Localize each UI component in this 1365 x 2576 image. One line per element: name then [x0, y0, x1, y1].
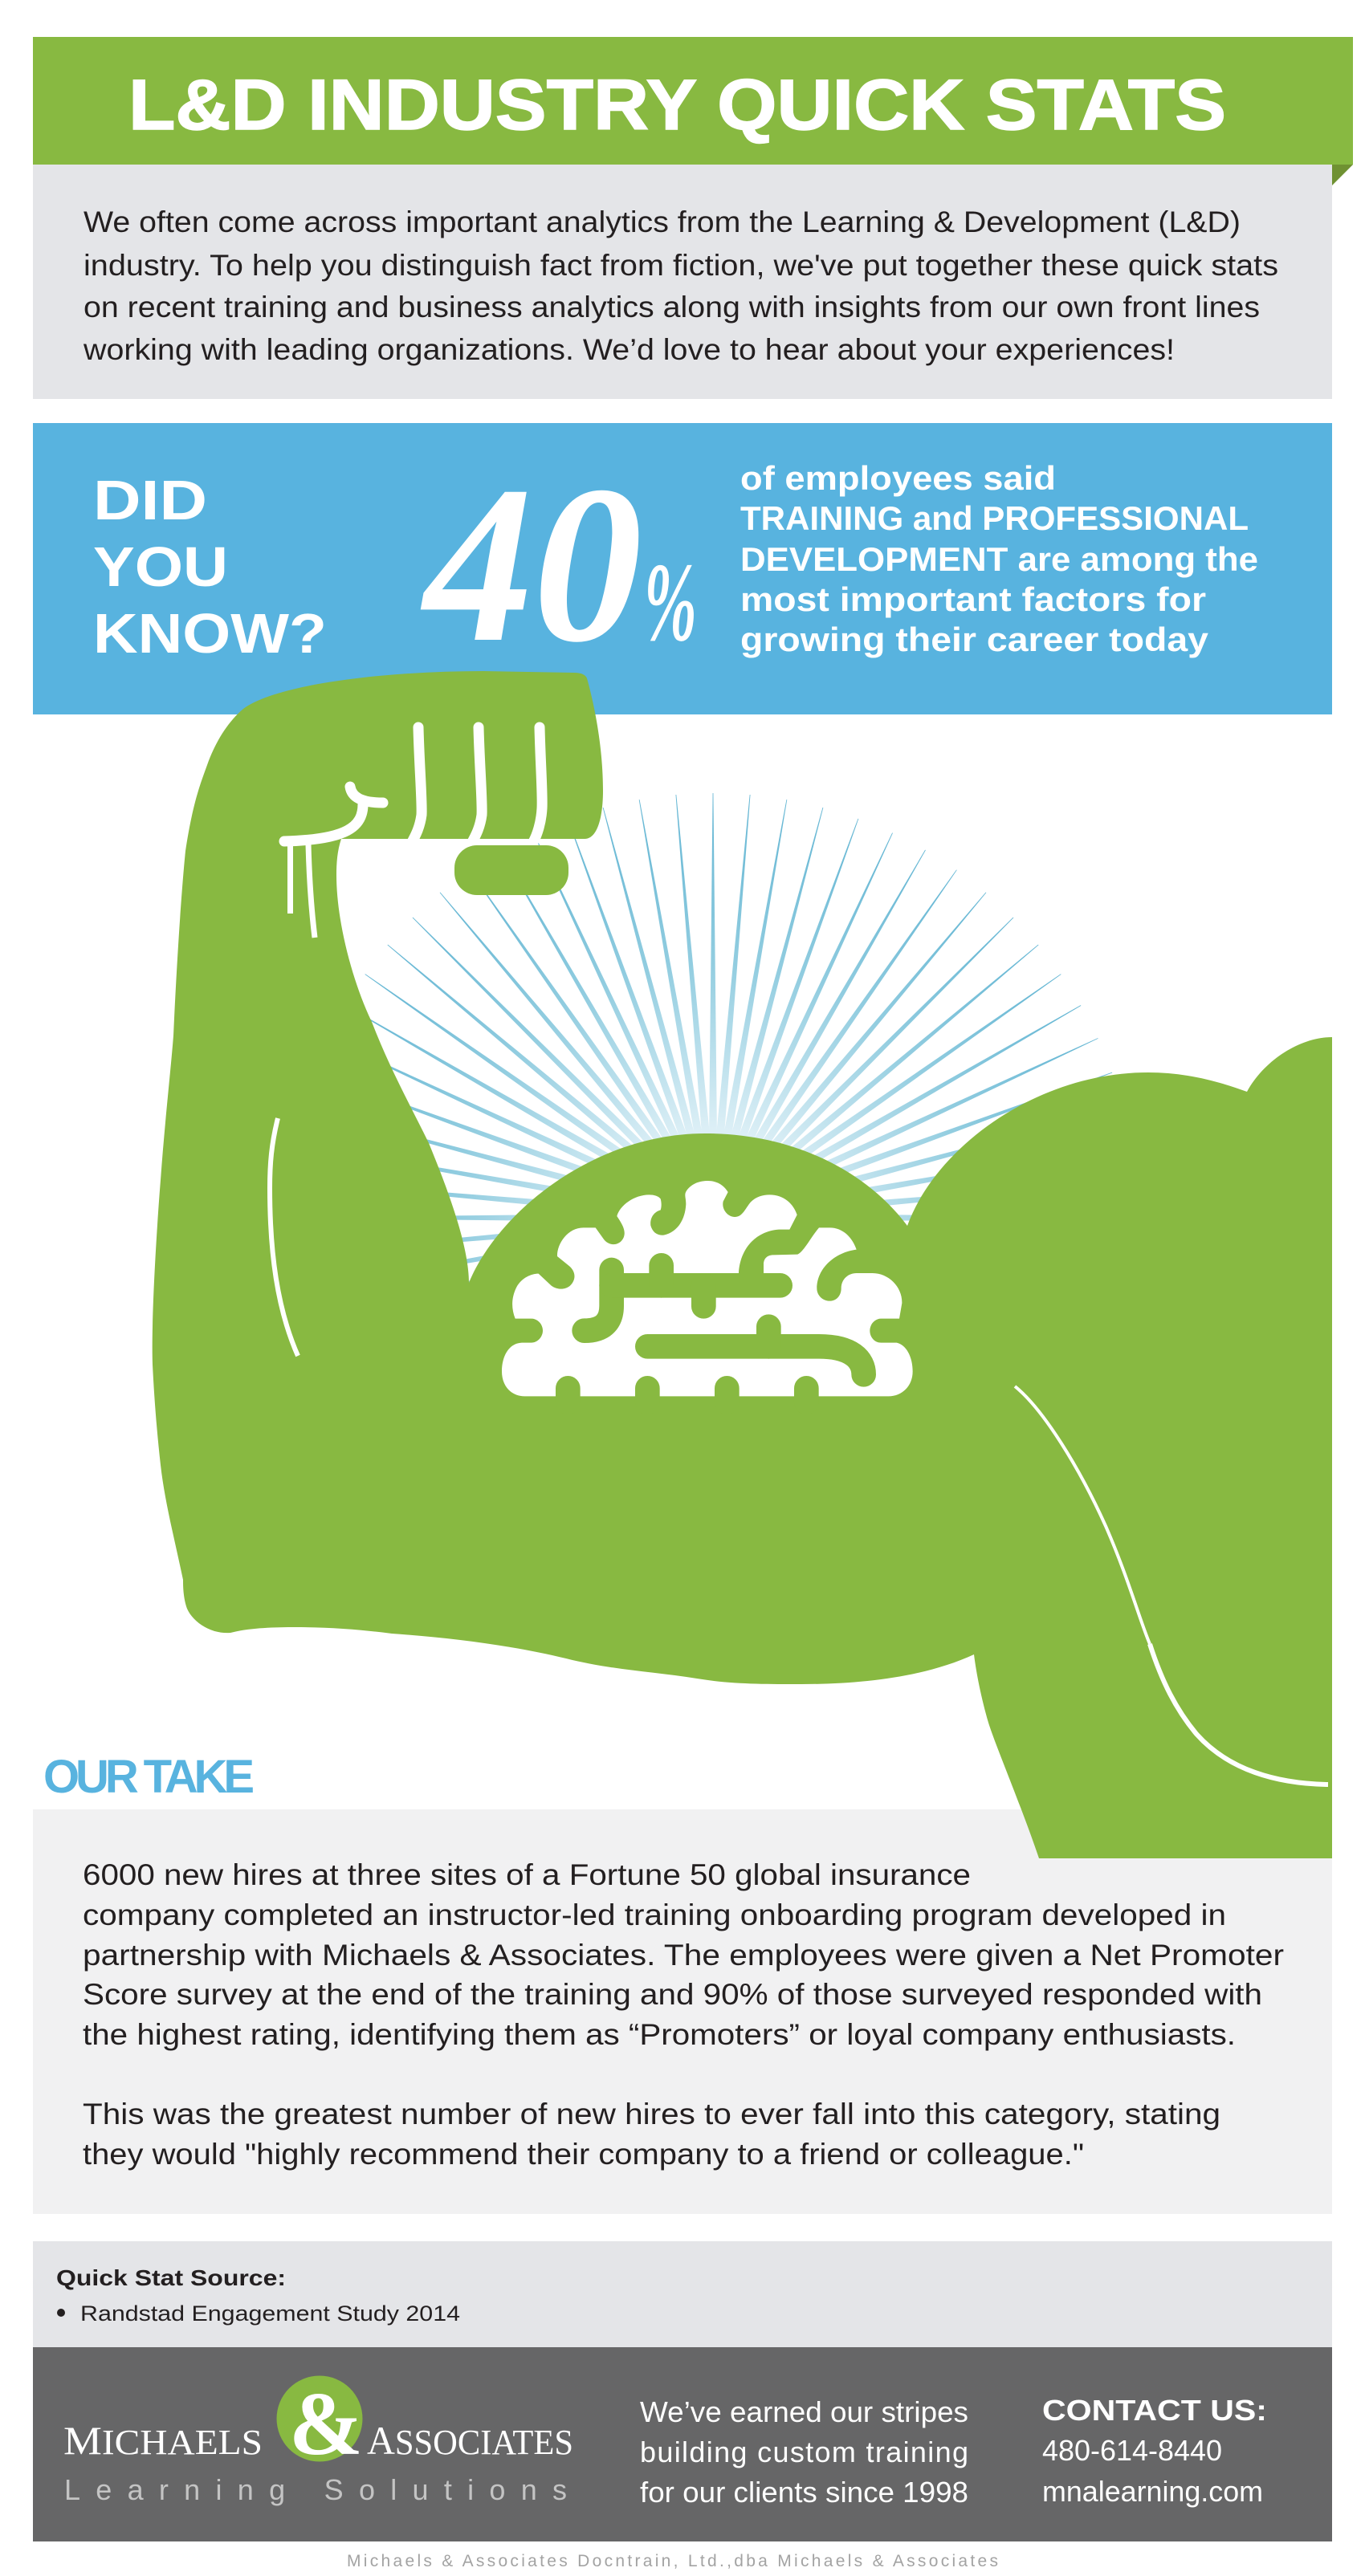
tagline: for our clients since 1998 — [640, 2476, 968, 2509]
intro text block — [83, 206, 1278, 366]
logo: Learning Solutions — [64, 2473, 567, 2506]
our take text: the highest rating, identifying them as “Promoters” or loyal company enthusiasts. — [83, 2018, 1236, 2051]
tagline: building custom training — [640, 2436, 968, 2468]
arm muscle line left — [270, 1118, 298, 1356]
panel: did you know — [33, 423, 1332, 714]
fist: finger lines — [284, 727, 542, 842]
did you know heading: DID — [93, 469, 207, 531]
contact — [1042, 2394, 1267, 2508]
intro text block: on recent training and business analytics along with insights from our own front lines — [84, 291, 1260, 324]
source heading: Quick Stat Source: — [56, 2265, 286, 2290]
tagline: We’ve earned our stripes — [640, 2395, 968, 2428]
our take text: This was the greatest number of new hires to ever fall into this category, stating — [83, 2098, 1220, 2130]
panel: our take — [33, 1809, 1332, 2214]
intro text block: industry. To help you distinguish fact from fiction, we've put together these quick stats — [84, 249, 1278, 282]
tagline — [640, 2395, 968, 2509]
big stat 40 percent: % — [644, 540, 697, 665]
stat description: TRAINING and PROFESSIONAL — [740, 499, 1249, 537]
sunburst rays — [288, 793, 1138, 1332]
stat description: growing their career today — [740, 621, 1209, 658]
logo: & — [289, 2375, 363, 2474]
our take text: 6000 new hires at three sites of a Fortune 50 global insurance — [83, 1858, 971, 1891]
our take text: Score survey at the end of the training and 90% of those surveyed responded with — [83, 1978, 1262, 2011]
footer legal line: Michaels & Associates Docntrain, Ltd.,dba Michaels & Associates — [347, 2552, 998, 2570]
intro text block: working with leading organizations. We’d love to hear about your experiences! — [83, 333, 1175, 366]
panel: quick stat source — [33, 2241, 1332, 2347]
title: L&D INDUSTRY QUICK STATS — [128, 64, 1226, 144]
icon: brain — [502, 1181, 913, 1402]
icon: thumb pill — [454, 845, 568, 895]
stat description: DEVELOPMENT are among the — [740, 540, 1258, 578]
panel: intro — [33, 165, 1332, 399]
our take text — [83, 1858, 1284, 2171]
our take text: partnership with Michaels & Associates. The employees were given a Net Promoter — [83, 1939, 1284, 1972]
stat description: most important factors for — [740, 580, 1206, 618]
panel: footer — [33, 2347, 1332, 2541]
title banner — [33, 37, 1353, 185]
contact: mnalearning.com — [1042, 2475, 1263, 2508]
arm muscle line right — [1015, 1386, 1328, 1784]
stat description: of employees said — [740, 459, 1056, 497]
did you know heading — [93, 469, 327, 665]
intro text block: We often come across important analytics from the Learning & Development (L&D) — [84, 206, 1241, 238]
fist: wrist tendons — [291, 844, 315, 938]
big stat 40 percent: 40 — [421, 439, 642, 689]
contact: 480-614-8440 — [1042, 2434, 1222, 2467]
logo: MICHAELS — [63, 2418, 263, 2463]
our take text: they would "highly recommend their company to a friend or colleague." — [83, 2138, 1084, 2171]
source bullet item: Randstad Engagement Study 2014 — [80, 2301, 460, 2326]
stat description — [740, 459, 1258, 658]
did you know heading: KNOW? — [93, 602, 327, 665]
our take text: company completed an instructor-led training onboarding program developed in — [83, 1898, 1226, 1931]
logo: ASSOCIATES — [367, 2418, 573, 2463]
logo — [63, 2375, 573, 2506]
heading: our take: OUR TAKE — [43, 1751, 255, 1803]
icon: flexed arm — [153, 671, 1332, 1858]
contact: CONTACT US: — [1042, 2394, 1267, 2427]
did you know heading: YOU — [93, 535, 228, 598]
